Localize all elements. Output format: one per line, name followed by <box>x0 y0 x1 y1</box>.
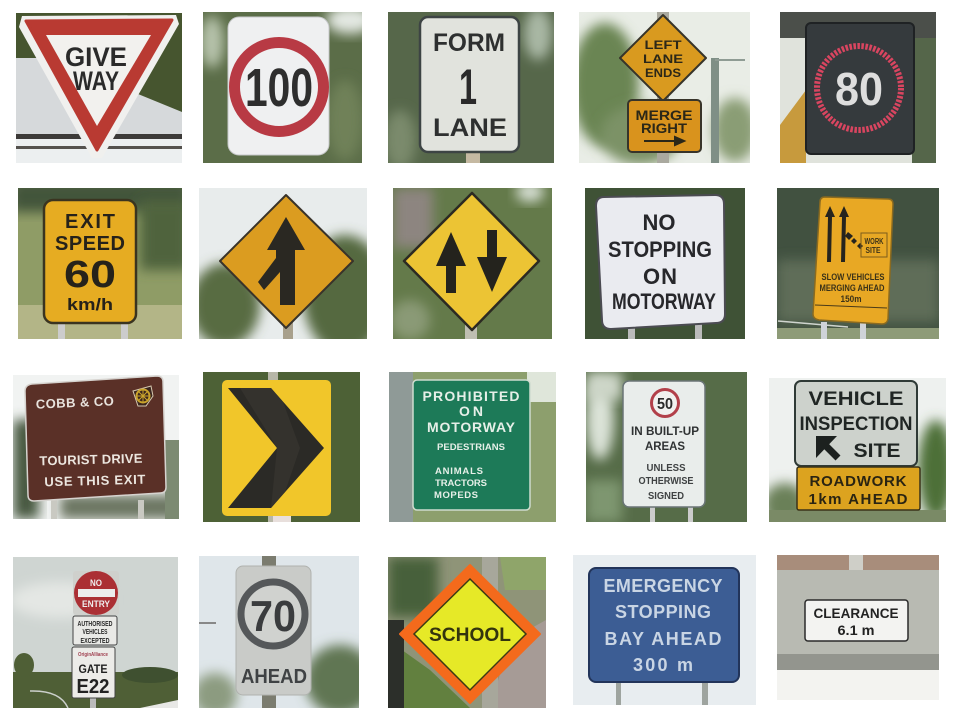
sign photo: give way: WAY <box>73 66 119 96</box>
sign photo: electronic 80 speed limit <box>780 12 936 163</box>
sign photo: school zone diamond <box>388 557 546 708</box>
sign photo: prohibited on motorway: PEDESTRIANS <box>437 442 505 453</box>
sign photo: slow vehicles merging ahead <box>777 188 939 339</box>
sign photo: electronic 80 speed limit: 80 <box>835 63 883 115</box>
sign photo: prohibited on motorway: MOPEDS <box>434 490 478 501</box>
sign photo: left lane ends, merge right <box>571 12 757 165</box>
sign photo: chevron <box>203 372 360 522</box>
sign photo: no entry, authorised vehicles excepted, gate E22: GATE <box>78 662 108 676</box>
sign photo: 50 in built-up areas: AREAS <box>645 439 685 453</box>
sign photo: form 1 lane <box>384 8 554 170</box>
icon: Cobb and Co wheel badge <box>133 386 153 406</box>
sign photo: emergency stopping bay ahead: 300 m <box>633 655 693 675</box>
sign photo: clearance 6.1 m <box>777 555 939 700</box>
sign photo: prohibited on motorway: ON <box>459 403 483 419</box>
sign photo: 50 in built-up areas: UNLESS <box>646 462 686 474</box>
sign photo: exit speed 60: km/h <box>67 295 113 314</box>
sign photo: no entry, authorised vehicles excepted, gate E22: NO <box>90 578 102 588</box>
sign photo: clearance 6.1 m: CLEARANCE <box>814 605 898 621</box>
sign photo: 50 in built-up areas: OTHERWISE <box>638 475 694 487</box>
sign photo: 70 ahead <box>199 556 359 708</box>
sign photo: left lane ends, merge right: MERGE <box>636 107 692 123</box>
sign photo: no entry, authorised vehicles excepted, gate E22 <box>10 557 178 708</box>
sign photo: no entry, authorised vehicles excepted, gate E22: EXCEPTED <box>80 636 110 645</box>
sign photo: Cobb and Co tourist drive <box>13 375 179 519</box>
sign photo: vehicle inspection site, roadwork ahead: VEHICLE <box>808 389 904 410</box>
sign photo: give way: GIVE <box>65 42 127 72</box>
sign photo: 50 in built-up areas <box>586 372 747 522</box>
sign photo: 70 ahead: 70 <box>250 592 296 641</box>
sign photo: left lane ends, merge right: ENDS <box>645 66 681 80</box>
sign photo: form 1 lane: LANE <box>433 114 507 142</box>
sign photo: 100 speed limit: 100 <box>245 58 313 118</box>
sign photo: exit speed 60: EXIT <box>65 211 115 233</box>
sign photo: prohibited on motorway: TRACTORS <box>435 478 487 489</box>
sign photo: no entry, authorised vehicles excepted, gate E22: OriginAlliance <box>78 652 108 658</box>
sign photo: slow vehicles merging ahead: MERGING AHEAD <box>820 283 885 294</box>
sign photo: 50 in built-up areas: IN BUILT-UP <box>631 424 699 438</box>
sign photo: no stopping on motorway: ON <box>643 264 677 289</box>
sign photo: school zone diamond: SCHOOL <box>429 625 511 646</box>
sign photo: vehicle inspection site, roadwork ahead: INSPECTION <box>800 414 912 435</box>
sign photo: emergency stopping bay ahead: STOPPING <box>615 602 711 622</box>
sign photo: emergency stopping bay ahead: BAY AHEAD <box>604 629 722 649</box>
sign photo: no entry, authorised vehicles excepted, gate E22: AUTHORISED <box>78 619 113 628</box>
sign photo: exit speed 60 <box>18 188 182 339</box>
sign photo: vehicle inspection site, roadwork ahead: 1km AHEAD <box>808 491 908 508</box>
sign photo: form 1 lane: FORM <box>433 29 505 57</box>
sign photo: exit speed 60: SPEED <box>55 233 125 255</box>
sign photo: left lane ends, merge right: LEFT <box>644 38 682 52</box>
sign photo: no entry, authorised vehicles excepted, gate E22: ENTRY <box>82 599 110 609</box>
sign photo: prohibited on motorway: ANIMALS <box>435 466 483 477</box>
sign photo: no stopping on motorway: NO <box>642 210 676 235</box>
sign photo: Cobb and Co tourist drive: USE THIS EXIT <box>44 472 146 489</box>
sign photo: Cobb and Co tourist drive: COBB & CO <box>36 393 114 412</box>
sign photo: left lane ends, merge right: RIGHT <box>641 120 687 136</box>
sign photo: vehicle inspection site, roadwork ahead: ROADWORK <box>810 473 907 490</box>
sign photo: prohibited on motorway <box>389 372 556 522</box>
sign photo: no stopping on motorway: MOTORWAY <box>612 289 716 314</box>
sign photo: slow vehicles merging ahead: SITE <box>866 246 881 255</box>
sign photo: 70 ahead: AHEAD <box>241 666 307 688</box>
sign photo: no stopping on motorway: STOPPING <box>608 237 712 262</box>
sign photo: slow vehicles merging ahead: SLOW VEHICLES <box>822 272 884 283</box>
sign photo: clearance 6.1 m: 6.1 m <box>838 622 874 638</box>
sign photo: no entry, authorised vehicles excepted, gate E22: E22 <box>76 676 110 698</box>
sign photo: Cobb and Co tourist drive: TOURIST DRIVE <box>39 451 143 468</box>
sign photo: 100 speed limit <box>203 12 362 163</box>
sign photo: vehicle inspection site, roadwork ahead <box>769 378 946 522</box>
sign photo: slow vehicles merging ahead: 150m <box>840 294 862 305</box>
sign photo: prohibited on motorway: PROHIBITED <box>422 388 520 404</box>
sign photo: no stopping on motorway <box>585 188 745 339</box>
sign photo: 50 in built-up areas: 50 <box>657 396 673 413</box>
sign photo: emergency stopping bay ahead <box>573 555 756 705</box>
sign photo: emergency stopping bay ahead: EMERGENCY <box>604 576 722 596</box>
sign photo: 50 in built-up areas: SIGNED <box>648 490 684 502</box>
sign photo: two-way arrows diamond <box>390 182 552 340</box>
sign photo: no entry, authorised vehicles excepted, gate E22: VEHICLES <box>82 627 108 636</box>
sign photo: left lane ends, merge right: LANE <box>643 52 683 66</box>
sign photo: form 1 lane: 1 <box>459 59 477 115</box>
sign photo: merge diamond <box>199 188 367 339</box>
sign photo: slow vehicles merging ahead: WORK <box>864 237 884 246</box>
sign photo: vehicle inspection site, roadwork ahead: SITE <box>854 441 900 462</box>
sign photo: exit speed 60: 60 <box>64 254 116 296</box>
sign photo: give way <box>16 13 182 163</box>
sign photo: prohibited on motorway: MOTORWAY <box>427 419 516 435</box>
